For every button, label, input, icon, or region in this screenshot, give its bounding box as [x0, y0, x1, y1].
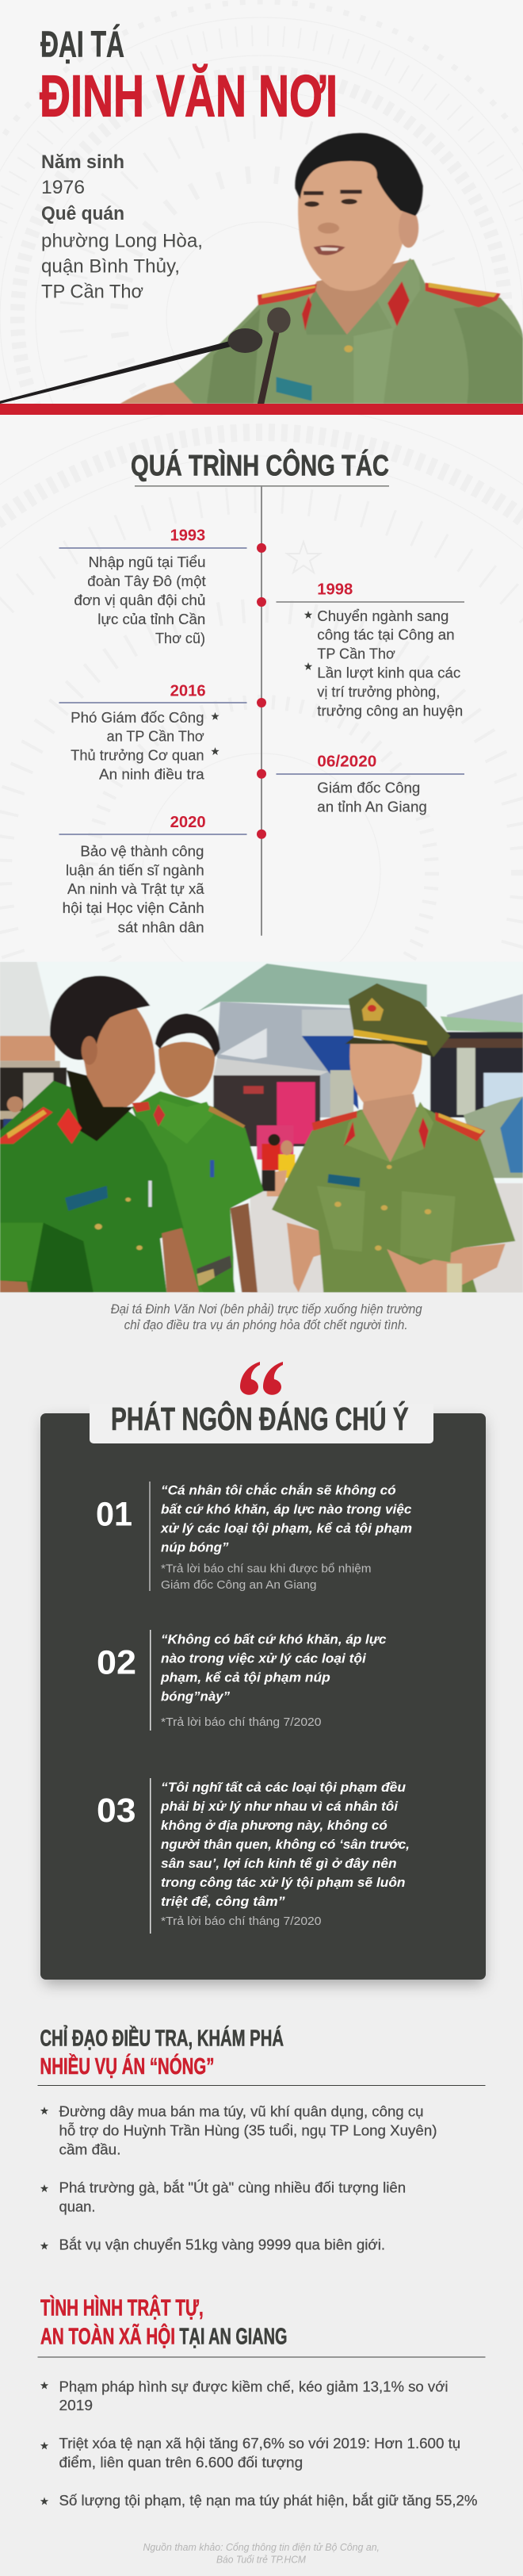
list: public order: Triệt xóa tệ nạn xã hội tăng 67,6% so với 2019: Hơn 1.600 tụ: [59, 2436, 460, 2451]
profile text block: phường Long Hòa,: [41, 231, 203, 252]
timeline entry: 2016: an TP Cần Thơ: [107, 729, 204, 745]
statement 03: 03: [97, 1792, 136, 1830]
timeline entry: 2020: 2020: [170, 814, 206, 831]
statement 02: [97, 1630, 387, 1731]
rule: [38, 2085, 485, 2086]
title tab: [90, 1404, 433, 1443]
panel: notable statements: [40, 1404, 486, 1980]
panel shadow: [44, 1420, 484, 1984]
timeline entry: 1998: vị trí trưởng phòng,: [317, 684, 440, 700]
heading: notable statements: PHÁT NGÔN ĐÁNG CHÚ Ý: [111, 1401, 409, 1437]
timeline entry: 1993: [59, 527, 266, 646]
timeline entry: 2020: An ninh và Trật tự xã: [67, 881, 205, 897]
statement 01: bất cứ khó khăn, áp lực nào trong việc: [161, 1502, 412, 1517]
timeline entry: 1998: Lần lượt kinh qua các: [317, 665, 460, 680]
timeline entry: 1998: TP Cần Thơ: [317, 646, 395, 661]
timeline entry: 1993: Thơ cũ): [155, 631, 205, 646]
photo caption: Đại tá Đinh Văn Nơi (bên phải) trực tiếp xuống hiện trường: [111, 1301, 422, 1317]
timeline entry: 2020: hội tại Học viện Cảnh: [63, 900, 204, 916]
timeline entry: 1993: lực của tỉnh Cần: [97, 611, 205, 627]
list: public order: Số lượng tội phạm, tệ nạn ma túy phát hiện, bắt giữ tăng 55,2%: [59, 2492, 477, 2509]
timeline entry: 06/2020: an tỉnh An Giang: [317, 799, 427, 815]
timeline entry: 2020: [59, 814, 266, 935]
profile text block: quận Bình Thủy,: [41, 256, 180, 278]
list: investigations: quan.: [59, 2198, 95, 2214]
timeline entry: 2016: An ninh điều tra: [99, 766, 205, 782]
title: name: ĐINH VĂN NƠI: [40, 63, 338, 128]
list: public order: điểm, liên quan trên 6.600 đối tượng: [59, 2455, 303, 2471]
statement 02: *Trả lời báo chí tháng 7/2020: [161, 1715, 322, 1729]
statement 01: Giám đốc Công an An Giang: [161, 1578, 317, 1592]
statement 03: phải bị xử lý như nhau vì cá nhân tôi: [160, 1799, 399, 1814]
statement 01: [96, 1482, 412, 1592]
statement 02: 02: [97, 1644, 136, 1682]
statement 02: “Không có bất cứ khó khăn, áp lực: [161, 1631, 387, 1646]
statement 03: trong công tác xử lý tội phạm sẽ luôn: [161, 1875, 406, 1890]
timeline entry: 1998: [257, 581, 464, 719]
statement 01: xử lý các loại tội phạm, kể cả tội phạm: [160, 1521, 412, 1536]
list: public order: Phạm pháp hình sự được kiềm chế, kéo giảm 13,1% so với: [59, 2379, 449, 2394]
list: public order: 2019: [59, 2398, 93, 2413]
statement 03: triệt để, công tâm”: [161, 1894, 285, 1909]
list: investigations: hỗ trợ do Huỳnh Trần Hùng (35 tuổi, ngụ TP Long Xuyên): [59, 2122, 437, 2138]
timeline entry: 06/2020: 06/2020: [317, 753, 376, 770]
source note: Nguồn tham khảo: Cổng thông tin điện tử Bộ Công an,: [143, 2541, 380, 2553]
timeline entry: 2016: Phó Giám đốc Công: [71, 710, 204, 726]
rule: [38, 2357, 485, 2358]
drum pattern: timeline: [285, 540, 322, 574]
timeline axis: [261, 487, 262, 936]
heading: work history: QUÁ TRÌNH CÔNG TÁC: [131, 448, 389, 481]
profile text block: Quê quán: [41, 203, 124, 224]
source note: Báo Tuổi trẻ TP.HCM: [216, 2554, 306, 2566]
heading: investigations: NHIỀU VỤ ÁN “NÓNG”: [40, 2053, 214, 2080]
list: public order: [40, 2379, 478, 2509]
timeline entry: 2020: Bảo vệ thành công: [80, 844, 204, 860]
list: investigations: [40, 2103, 437, 2252]
timeline entry: 1998: trưởng công an huyện: [317, 703, 463, 719]
statement 03: [97, 1778, 410, 1934]
statement 01: “Cá nhân tôi chắc chắn sẽ không có: [161, 1483, 396, 1498]
profile text block: TP Cần Thơ: [41, 281, 143, 302]
icon: red quotation mark: [240, 1362, 283, 1395]
timeline entry: 06/2020: Giám đốc Công: [317, 780, 420, 796]
statement 03: người thân quen, không có ‘sân trước,: [161, 1837, 410, 1852]
photo caption: [111, 1301, 422, 1332]
drum pattern: header: [0, 2, 523, 633]
statement 03: sân sau’, lợi ích kinh tế gì ở đây nên: [161, 1856, 397, 1871]
heading: public order: TÌNH HÌNH TRẬT TỰ,: [40, 2294, 204, 2321]
timeline entry: 1993: Nhập ngũ tại Tiểu: [89, 554, 206, 570]
timeline entry: 2020: sát nhân dân: [118, 919, 204, 935]
heading: public order: [40, 2294, 287, 2349]
statement 01: núp bóng”: [161, 1540, 229, 1555]
heading underline: [135, 485, 389, 486]
heading: investigations: CHỈ ĐẠO ĐIỀU TRA, KHÁM PHÁ: [40, 2024, 284, 2051]
statement 01: 01: [96, 1496, 132, 1534]
statement 03: “Tôi nghĩ tất cả các loại tội phạm đều: [161, 1780, 407, 1795]
title: rank: ĐẠI TÁ: [40, 24, 124, 65]
profile text block: 1976: [41, 177, 85, 198]
heading: investigations: [40, 2024, 284, 2080]
middle officer: [132, 1091, 264, 1293]
red divider bar: [0, 404, 523, 415]
timeline entry: 1998: Chuyển ngành sang: [317, 608, 449, 624]
upper background panel: [0, 0, 523, 962]
heading: public order: AN TOÀN XÃ HỘI: [40, 2322, 175, 2349]
list: investigations: Phá trường gà, bắt "Út gà" cùng nhiều đối tượng liên: [59, 2179, 406, 2195]
statement 02: phạm, kể cả tội phạm núp: [160, 1669, 330, 1685]
list: investigations: cầm đầu.: [59, 2141, 120, 2157]
list: investigations: Đường dây mua bán ma túy, vũ khí quân dụng, công cụ: [59, 2103, 423, 2119]
timeline entry: 2016: 2016: [170, 682, 206, 700]
portrait photo of the colonel at microphones: [0, 133, 523, 404]
timeline entry: 1998: 1998: [317, 581, 353, 598]
source note: [143, 2541, 380, 2566]
statement 02: nào trong việc xử lý các loại tội: [161, 1650, 367, 1666]
timeline entry: 1993: đoàn Tây Đô (một: [87, 573, 206, 589]
photo caption: chỉ đạo điều tra vụ án phóng hỏa đốt chết người tình.: [124, 1317, 408, 1332]
statement 03: *Trả lời báo chí tháng 7/2020: [161, 1915, 322, 1928]
right officer: [286, 1223, 322, 1293]
timeline entry: 2016: [59, 682, 266, 782]
profile text block: Năm sinh: [41, 151, 124, 173]
heading: public order: TẠI AN GIANG: [179, 2324, 287, 2349]
timeline entry: 2016: Thủ trưởng Cơ quan: [71, 747, 204, 763]
statement 01: *Trả lời báo chí sau khi được bổ nhiệm: [161, 1562, 372, 1576]
timeline entry: 1993: đơn vị quân đội chủ: [74, 592, 205, 608]
statement 03: không ở địa phương này, không có: [161, 1818, 387, 1833]
field photo: three officers: [0, 960, 523, 1294]
timeline entry: 1993: 1993: [170, 527, 205, 544]
timeline entry: 06/2020: [257, 753, 464, 815]
list: investigations: Bắt vụ vận chuyển 51kg vàng 9999 qua biên giới.: [59, 2237, 385, 2252]
profile text block: [41, 151, 203, 302]
timeline entry: 1998: công tác tại Công an: [317, 627, 455, 643]
left officer: [0, 1081, 183, 1293]
statement 02: bóng”này”: [161, 1689, 230, 1704]
timeline entry: 2020: luận án tiến sĩ ngành: [66, 862, 204, 878]
